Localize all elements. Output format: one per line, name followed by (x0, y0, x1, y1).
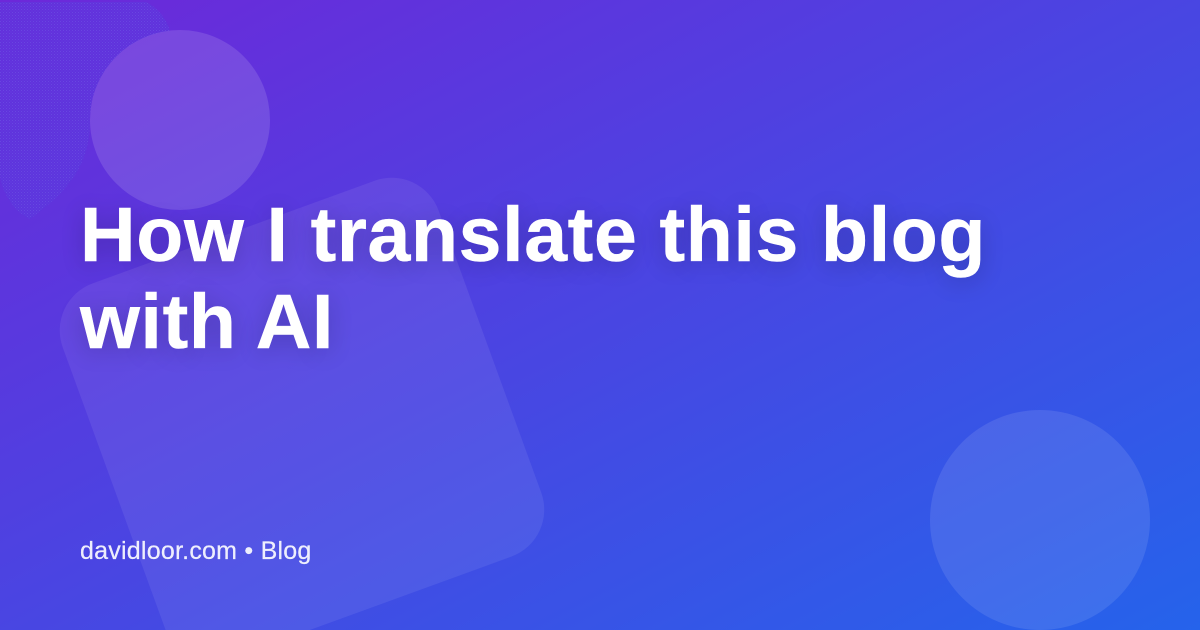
decorative circle: bottom right (930, 410, 1150, 630)
site and section label: davidloor.com • Blog (80, 537, 312, 565)
title: How I translate this blog (80, 192, 986, 278)
decorative rounded square (60, 178, 544, 630)
title (76, 192, 990, 365)
title: with AI (80, 279, 334, 365)
decorative circle: top left (90, 30, 270, 210)
decorative dithered blob (0, 2, 170, 219)
